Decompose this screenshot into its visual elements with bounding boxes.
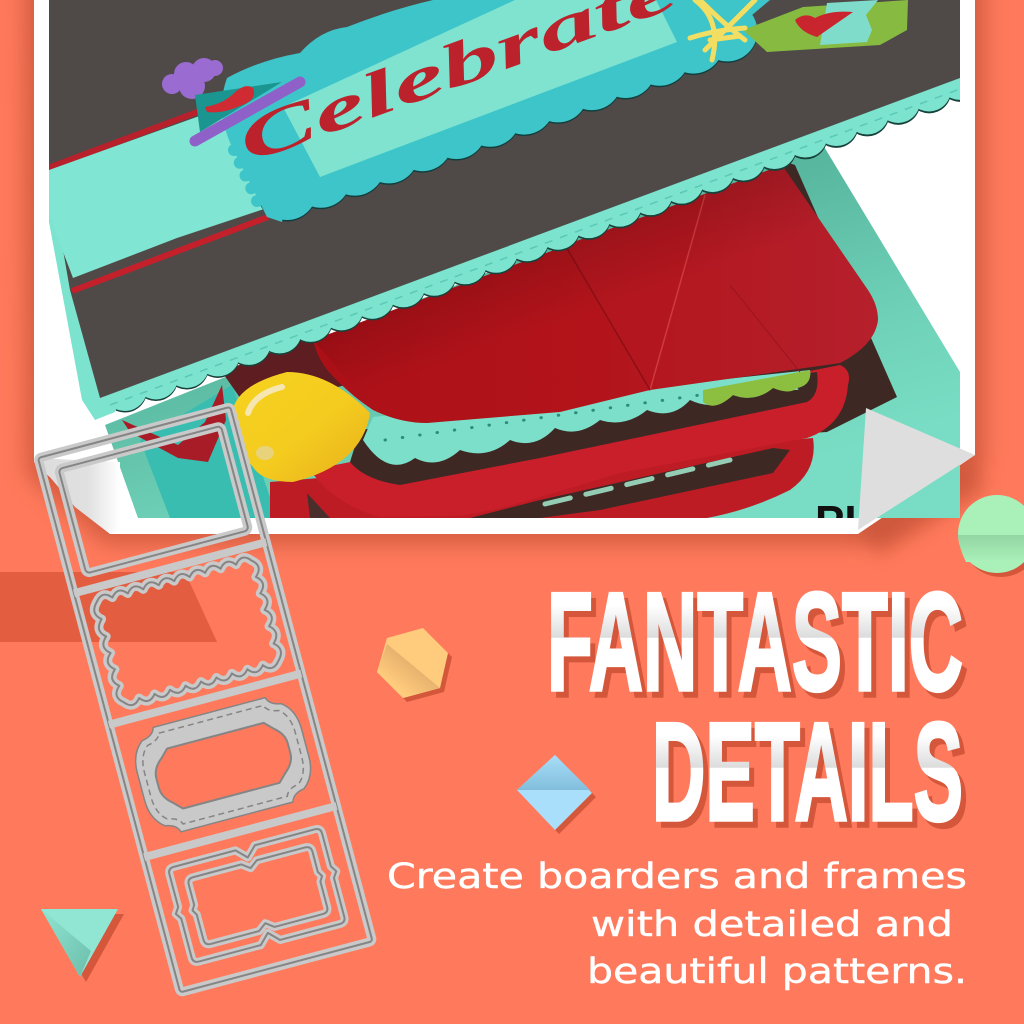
hat heart [205, 86, 254, 112]
circle decoration [958, 495, 1024, 577]
tag aqua patch [820, 0, 878, 45]
lower brown layer [470, 448, 790, 518]
white paper [34, 0, 975, 534]
embossed dots [385, 395, 700, 440]
printed text fragment: PI [815, 497, 857, 546]
red ribbon upper [48, 111, 200, 168]
hexagon decoration [377, 628, 452, 702]
description text: with detailed and [591, 905, 953, 945]
die 1: square window [59, 426, 249, 573]
tag green body [743, 0, 908, 52]
photo of card [48, 0, 1000, 546]
die-cut metal frame [38, 407, 373, 992]
balloon highlights [248, 387, 282, 460]
envelope shade [316, 168, 810, 372]
tag heart [795, 12, 853, 37]
hat brim [195, 82, 300, 141]
hat pompom [162, 58, 223, 99]
teal inner panel [140, 385, 277, 518]
aqua band [49, 105, 267, 278]
dark heart [122, 385, 226, 462]
top board aqua edge [49, 78, 960, 420]
back aqua card [105, 140, 960, 518]
banner inner panel [283, 0, 677, 177]
diamond decoration [517, 755, 596, 834]
heading [547, 563, 968, 856]
outer frame and dividers [38, 407, 373, 992]
back brown layer [724, 164, 897, 432]
description text: beautiful patterns. [587, 952, 967, 992]
small aqua scallops [545, 460, 730, 504]
yellow twine [690, 0, 755, 60]
flap creases [565, 195, 800, 390]
dotted aqua scallop layer [363, 370, 810, 465]
die 2: wavy frame [91, 554, 284, 708]
left page curl [34, 458, 120, 534]
die 3: stitched label frame [127, 691, 319, 839]
middle red layer [310, 365, 849, 517]
celebrate lettering: Celebrate [230, 0, 685, 176]
red ribbon lower [72, 217, 268, 291]
maroon behind balloon [225, 340, 343, 397]
dark grey board [49, 0, 960, 398]
description text [387, 857, 967, 992]
right page curl [858, 408, 975, 530]
left brown sliver [307, 493, 330, 518]
photo panel [34, 0, 1000, 546]
panel shadow [24, 0, 985, 555]
triangle decoration [41, 909, 124, 982]
description text: Create boarders and frames [387, 857, 967, 897]
background strip [0, 572, 217, 642]
scalloped banner [222, 0, 770, 222]
middle brown layer [350, 372, 818, 485]
die 4: bracket frames [164, 827, 350, 964]
envelope flap [576, 217, 650, 391]
party hat [162, 58, 300, 141]
hat body [195, 82, 282, 132]
main red envelope [313, 165, 878, 423]
yellow balloon [232, 372, 370, 482]
lower red layer [270, 438, 814, 518]
gift tag [743, 0, 908, 52]
green scallop end [703, 370, 810, 406]
